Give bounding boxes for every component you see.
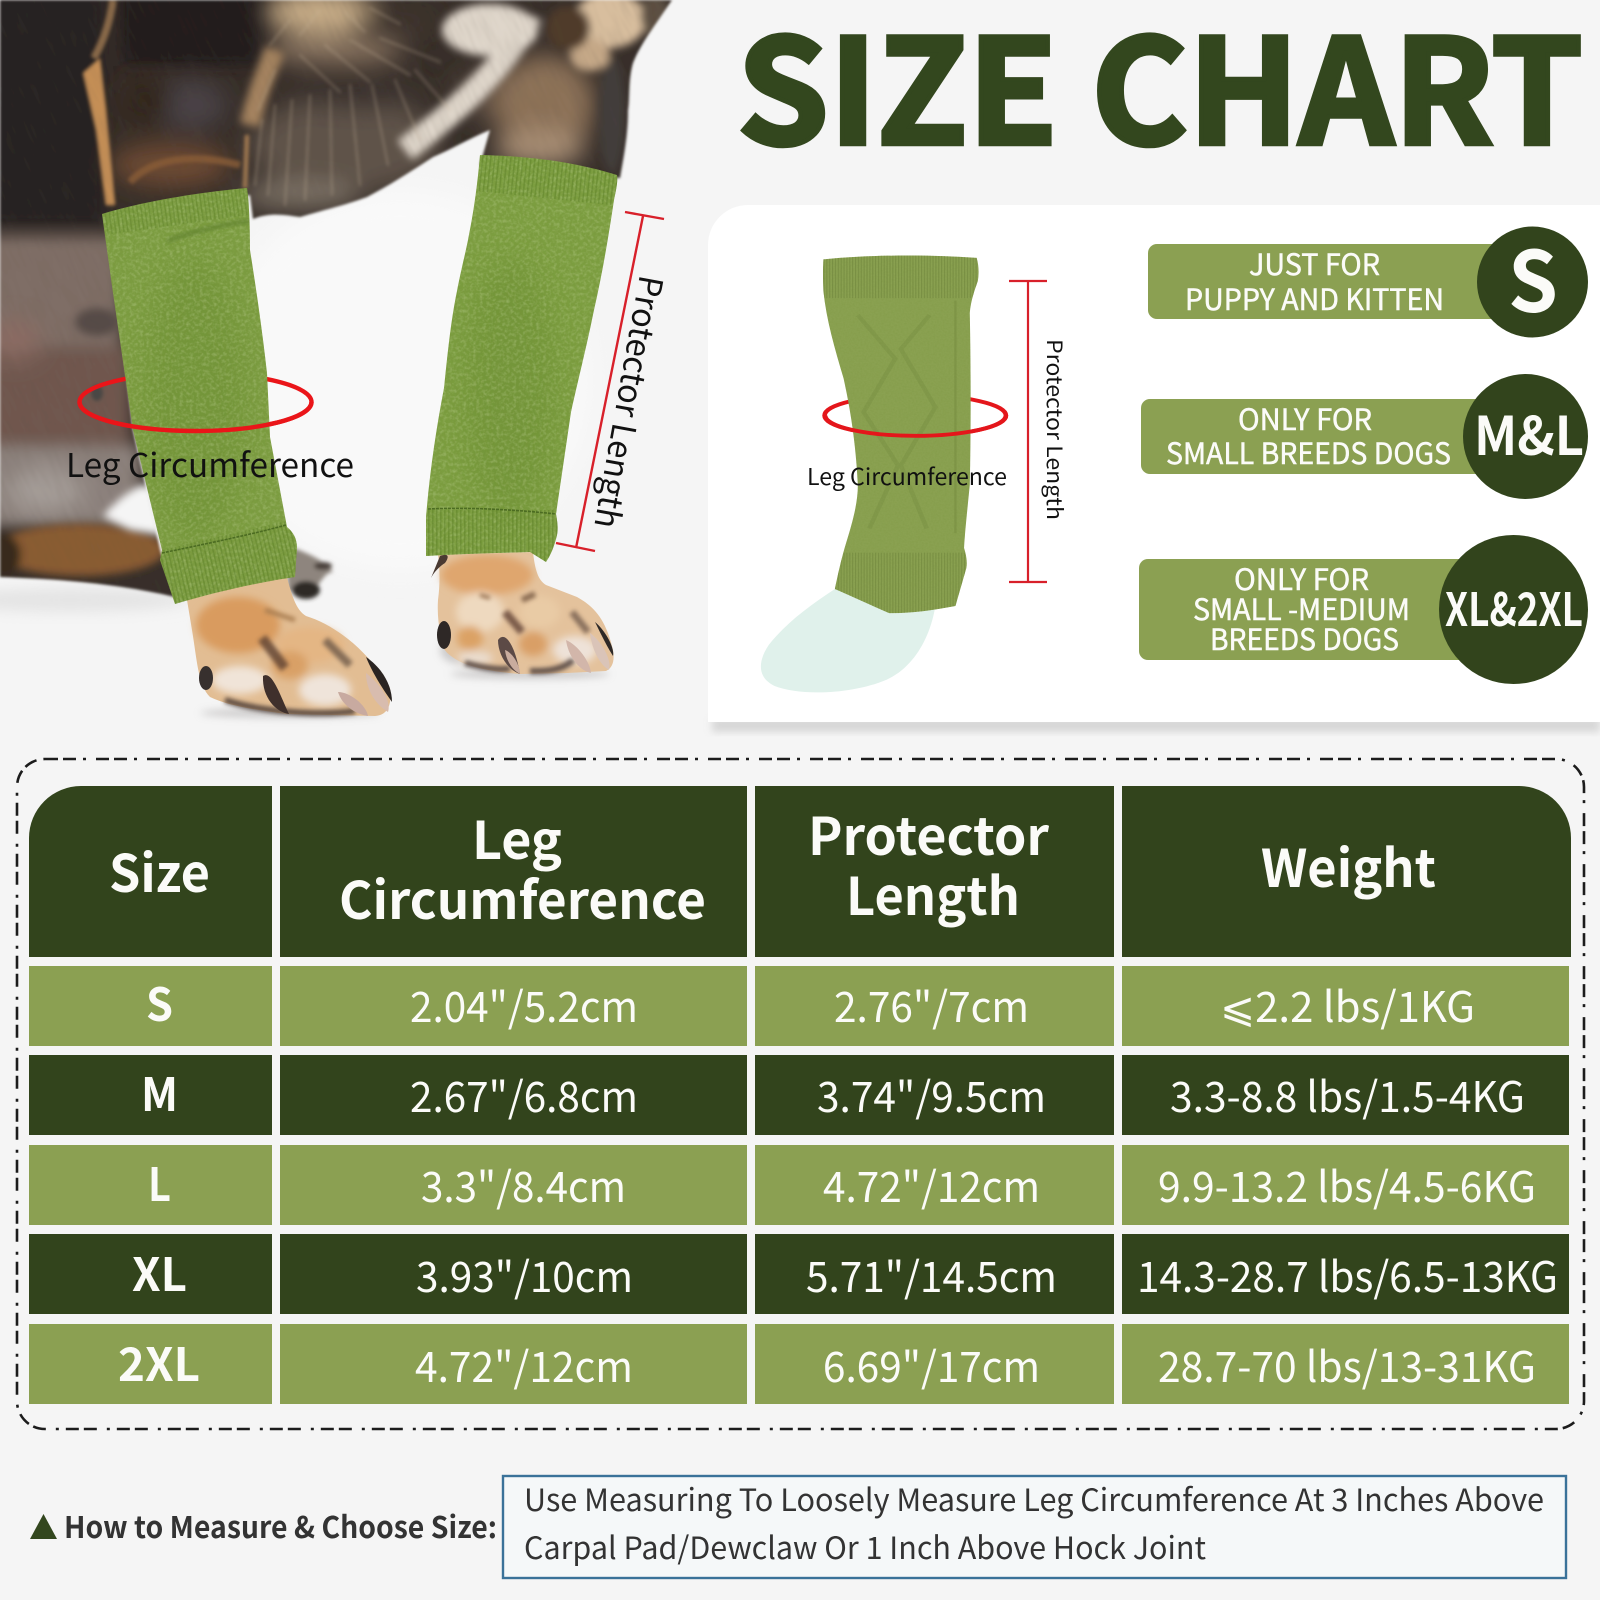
table header row (29, 786, 1571, 957)
row: L: 3.3"/8.4cm (421, 1154, 626, 1215)
table header row: Size (109, 832, 210, 907)
row: S: 2.76"/7cm (834, 974, 1029, 1035)
size table (29, 786, 1571, 1404)
product: sock on model foot (761, 247, 1006, 692)
row: L: 9.9-13.2 lbs/4.5-6KG (1158, 1154, 1536, 1215)
rear paw behind sleeve (286, 545, 333, 599)
photo annotation: protector length text: Protector Length (584, 272, 677, 533)
product annotation: length bracket (1009, 281, 1047, 582)
row: S: 2.04"/5.2cm (410, 974, 638, 1035)
table header row: Length (846, 855, 1020, 930)
size badge: M&amp;L: M&L (1474, 395, 1584, 471)
row: L (29, 1145, 1569, 1225)
product annotation: length text: Protector Length (1040, 339, 1070, 520)
floor shade (0, 588, 190, 612)
size badge: XL&amp;2XL: BREEDS DOGS (1210, 617, 1399, 659)
icon: triangle marker (30, 1514, 57, 1539)
size badge: S: S (1508, 216, 1558, 337)
size badge: M&amp;L: SMALL BREEDS DOGS (1166, 431, 1451, 473)
row: S: S (146, 969, 173, 1035)
footer label: how to measure: How to Measure & Choose Size: (64, 1503, 497, 1547)
row: M: 2.67"/6.8cm (410, 1064, 638, 1125)
row: S (29, 966, 1569, 1046)
size badge: XL&amp;2XL (1139, 535, 1588, 684)
size badge: XL&amp;2XL: SMALL -MEDIUM (1193, 587, 1410, 629)
size badge: M&amp;L (1141, 374, 1588, 499)
photo annotation: leg circumference: Leg Circumference (66, 439, 354, 487)
row: XL: 5.71"/14.5cm (806, 1244, 1057, 1305)
row: M: 3.74"/9.5cm (817, 1064, 1046, 1125)
table header row: Circumference (339, 859, 706, 934)
backdrop glow between legs (210, 190, 590, 570)
row: L: 4.72"/12cm (823, 1154, 1040, 1215)
callout: measuring instructions: Carpal Pad/Dewclaw Or 1 Inch Above Hock Joint (524, 1523, 1206, 1568)
size badge: S: PUPPY AND KITTEN (1185, 277, 1444, 319)
callout: measuring instructions: Use Measuring To Loosely Measure Leg Circumference At 3 Inches Above (524, 1475, 1544, 1520)
row: M: M (141, 1059, 178, 1125)
row: XL (29, 1234, 1569, 1314)
fine hair strokes (255, 8, 450, 205)
row: XL: 14.3-28.7 lbs/6.5-13KG (1137, 1244, 1558, 1305)
right paw (431, 552, 614, 674)
table header row: Protector (808, 795, 1049, 870)
row: 2XL: 4.72"/12cm (415, 1334, 633, 1395)
size badge: S: JUST FOR (1249, 242, 1380, 284)
red ring front arc (80, 402, 312, 431)
row: S: ⩽2.2 lbs/1KG (1220, 974, 1475, 1035)
panel: product card (708, 205, 1600, 732)
dog body fur (0, 0, 674, 598)
callout: measuring instructions (503, 1475, 1566, 1578)
photo: dog front legs wearing protectors (0, 0, 1052, 834)
left paw (187, 574, 392, 716)
row: M (29, 1055, 1569, 1135)
photo annotation: protector length bracket (556, 212, 664, 551)
floor shadows (200, 636, 610, 718)
size badge: XL&amp;2XL: ONLY FOR (1234, 557, 1369, 599)
gap of light between legs (103, 485, 165, 536)
table header row: Leg (472, 799, 562, 874)
left leg protector sleeve (102, 188, 297, 604)
row: M: 3.3-8.8 lbs/1.5-4KG (1170, 1064, 1525, 1125)
right leg protector sleeve (426, 155, 618, 562)
panel: dashed table frame (17, 759, 1584, 1429)
row: XL: 3.93"/10cm (416, 1244, 633, 1305)
row: L: L (148, 1149, 171, 1215)
size badge: S (1148, 216, 1588, 338)
row: 2XL: 6.69"/17cm (823, 1334, 1040, 1395)
size badge: M&amp;L: ONLY FOR (1238, 397, 1372, 439)
row: XL: XL (132, 1239, 187, 1305)
product annotation: leg circumference: Leg Circumference (807, 458, 1007, 492)
row: 2XL: 2XL (118, 1329, 200, 1395)
table header row: Weight (1261, 827, 1436, 902)
row: 2XL: 28.7-70 lbs/13-31KG (1158, 1334, 1536, 1395)
row: 2XL (29, 1324, 1569, 1404)
red ring back arc (80, 373, 312, 431)
